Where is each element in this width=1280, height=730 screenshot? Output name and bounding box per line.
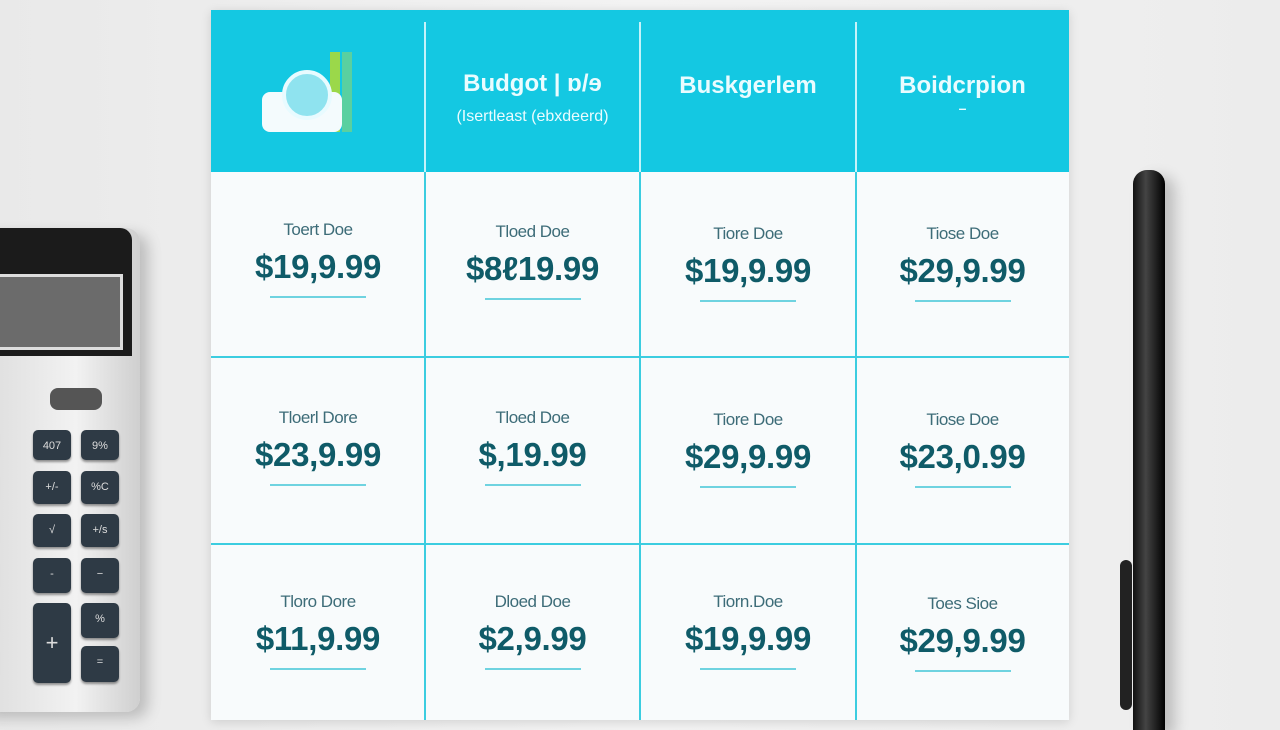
text: Tloed Doe bbox=[496, 408, 569, 427]
calculator: − bbox=[97, 568, 103, 580]
header: col 3: Buskgerlem bbox=[679, 72, 817, 99]
calculator: %C bbox=[91, 481, 109, 493]
calculator display bbox=[0, 228, 132, 356]
row 2: Tloerl Dore bbox=[279, 408, 357, 427]
calculator: +/s bbox=[92, 524, 107, 536]
price table bbox=[211, 10, 1069, 720]
text: $29,9.99 bbox=[899, 622, 1026, 659]
calculator: √ bbox=[49, 524, 55, 536]
text: Toes Sioe bbox=[927, 594, 998, 613]
calculator: +/- bbox=[45, 481, 59, 493]
row 1 bbox=[255, 220, 381, 298]
header: col 2: Budgot | ɒ/ɘ bbox=[463, 70, 602, 97]
text: Tloed Doe bbox=[496, 222, 569, 241]
pen bbox=[1133, 170, 1165, 730]
header: col 4 bbox=[899, 72, 1026, 116]
calculator: 9% bbox=[92, 440, 108, 452]
text: $19,9.99 bbox=[685, 620, 811, 657]
text: $8ℓ19.99 bbox=[466, 250, 599, 287]
row 1: $19,9.99 bbox=[255, 248, 381, 285]
header: col 4: – bbox=[959, 100, 966, 116]
text: Dloed Doe bbox=[495, 592, 570, 611]
text: $29,9.99 bbox=[685, 438, 811, 475]
icon: budget bbox=[262, 52, 352, 132]
text: Tiore Doe bbox=[713, 224, 783, 243]
row 1: Toert Doe bbox=[283, 220, 353, 239]
text: $2,9.99 bbox=[478, 620, 586, 657]
text: Tiorn.Doe bbox=[713, 592, 783, 611]
calculator: - bbox=[50, 568, 54, 580]
header band bbox=[211, 10, 1069, 172]
header: col 4: Boidcrpion bbox=[899, 72, 1026, 99]
calculator: 407 bbox=[43, 440, 61, 452]
text: $29,9.99 bbox=[899, 252, 1026, 289]
calculator: + bbox=[46, 630, 58, 655]
row 2 bbox=[255, 408, 381, 486]
row 3 bbox=[256, 592, 380, 670]
text: Tiose Doe bbox=[926, 224, 999, 243]
text: $,19.99 bbox=[478, 436, 586, 473]
text: $23,0.99 bbox=[899, 438, 1026, 475]
text: Tiore Doe bbox=[713, 410, 783, 429]
row 3: Tloro Dore bbox=[280, 592, 356, 611]
row 3: $11,9.99 bbox=[256, 620, 380, 657]
text: $19,9.99 bbox=[685, 252, 811, 289]
header: col 2: (Isertleast (ebxdeerd) bbox=[456, 108, 609, 125]
header: col 2 bbox=[456, 70, 609, 125]
text: Tiose Doe bbox=[926, 410, 999, 429]
calculator: % bbox=[95, 613, 105, 625]
calculator: = bbox=[97, 656, 103, 668]
calculator bbox=[0, 228, 140, 712]
row 2: $23,9.99 bbox=[255, 436, 381, 473]
calculator switch bbox=[50, 388, 102, 410]
